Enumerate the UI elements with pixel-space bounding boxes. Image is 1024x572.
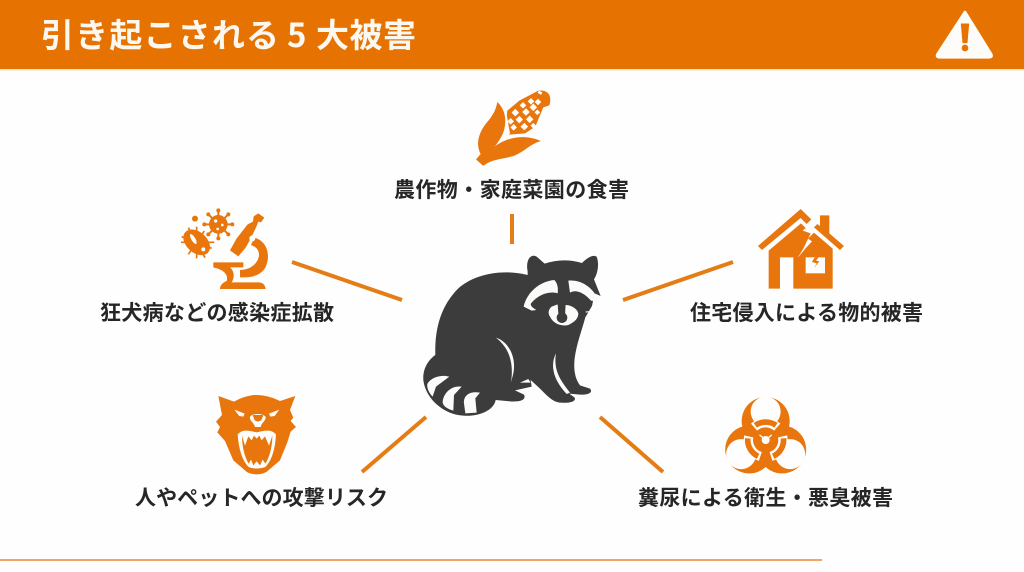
label: 糞尿による衛生・悪臭被害 <box>638 487 893 510</box>
raccoon body highlights <box>427 338 570 413</box>
title: 大被害 <box>316 17 416 54</box>
item: property damage <box>690 209 923 325</box>
label: 人やペットへの攻撃リスク <box>135 487 388 510</box>
item: infectious disease <box>100 208 334 325</box>
icon: corn <box>476 90 550 166</box>
microscope <box>213 213 268 289</box>
footer rule <box>0 559 822 561</box>
title: 5 <box>287 9 306 57</box>
bacterium <box>178 224 215 260</box>
title: 引き起こされる <box>41 17 279 54</box>
icon: snarling beast <box>216 395 296 474</box>
raccoon face mask <box>524 280 600 325</box>
header band <box>0 0 1024 70</box>
label: 農作物・家庭菜園の食害 <box>394 179 629 202</box>
icon: warning triangle <box>937 12 992 57</box>
icon: cracked house <box>758 209 844 289</box>
connector lines <box>292 214 733 472</box>
icon: biohazard <box>725 397 806 474</box>
item: crop damage <box>394 90 629 202</box>
item: hygiene damage <box>638 392 893 510</box>
item: attack risk <box>135 395 388 510</box>
icon: raccoon <box>423 256 601 416</box>
icon: microscope and germs <box>178 208 268 289</box>
label: 狂犬病などの感染症拡散 <box>100 301 334 325</box>
virus <box>202 208 234 240</box>
title <box>41 9 416 57</box>
label: 住宅侵入による物的被害 <box>690 302 923 325</box>
